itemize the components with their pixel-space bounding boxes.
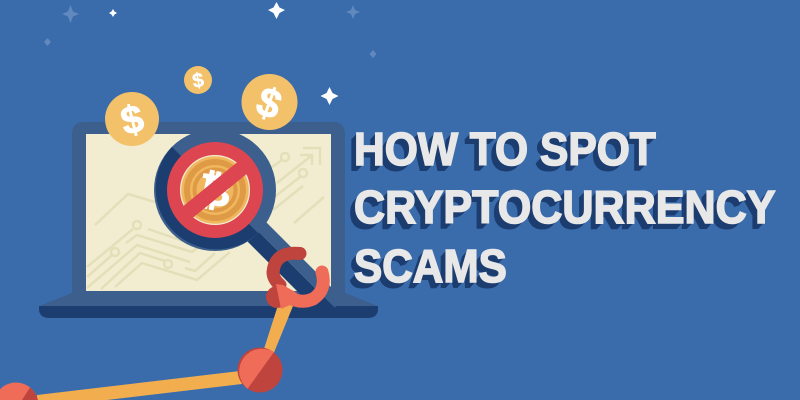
- joint: [238, 348, 282, 392]
- title: SCAMS: [354, 240, 507, 292]
- magnifying glass: [154, 129, 340, 308]
- laptop screen: [86, 134, 331, 291]
- background stars: [44, 2, 376, 105]
- circuit pattern: [87, 148, 324, 289]
- title: CRYPTOCURRENCY: [354, 181, 775, 233]
- arm segments: [37, 371, 242, 400]
- dollar coin left: $: [117, 97, 148, 144]
- lens ring: [154, 129, 276, 251]
- prohibition sign: [174, 148, 256, 232]
- title: HOW TO SPOT: [354, 123, 656, 175]
- gold bitcoin coin: [179, 154, 251, 226]
- dollar coin right: [242, 74, 298, 130]
- laptop: [39, 122, 378, 318]
- dollar coin small: [184, 66, 212, 94]
- dollar coin left: [105, 92, 159, 146]
- gold bitcoin coin: ₿: [193, 164, 237, 217]
- robot arm: [0, 253, 323, 400]
- dollar coin small: $: [191, 69, 206, 93]
- claw: [266, 253, 323, 309]
- dollar coin right: $: [251, 77, 288, 129]
- joint: [0, 383, 38, 400]
- handle: [255, 216, 340, 308]
